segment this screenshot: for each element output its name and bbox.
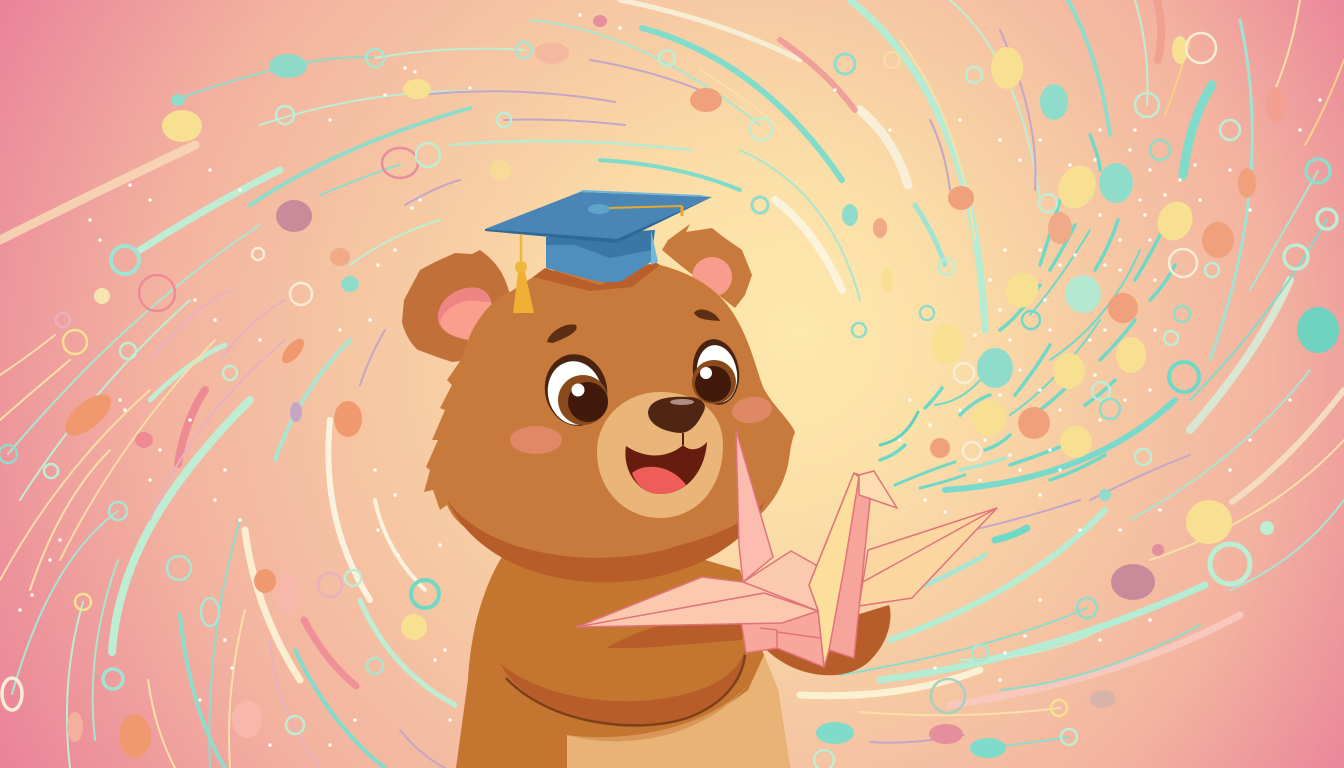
bear bbox=[402, 224, 891, 768]
eyebrows bbox=[547, 310, 720, 343]
bear body bbox=[456, 530, 790, 768]
bear arm bbox=[500, 610, 748, 725]
origami crane bbox=[577, 430, 997, 667]
swirl: dense teal dashes on the right bbox=[880, 135, 1175, 480]
crane tail spike bbox=[736, 430, 773, 582]
bear head bbox=[424, 263, 795, 580]
crane left wing bbox=[577, 577, 818, 627]
cap base bbox=[546, 230, 655, 282]
bear right ear bbox=[662, 224, 752, 308]
bear right hand bbox=[762, 605, 891, 675]
crane lower body bbox=[741, 600, 829, 667]
bear belly bbox=[567, 655, 790, 768]
crane head bbox=[859, 471, 897, 508]
cap board bbox=[485, 192, 712, 241]
graduation cap bbox=[485, 190, 712, 313]
mouth bbox=[625, 433, 707, 494]
bear left eye bbox=[538, 348, 614, 432]
cap cord and tassel bbox=[513, 206, 682, 313]
muzzle bbox=[597, 392, 723, 518]
nose bbox=[648, 397, 705, 433]
head lower shadow bbox=[447, 500, 766, 582]
bear left ear bbox=[402, 250, 510, 362]
crane right wing bbox=[859, 508, 997, 606]
crane neck bbox=[809, 473, 870, 667]
crane body top bbox=[743, 551, 818, 612]
cap button bbox=[588, 204, 610, 214]
bear right eye bbox=[689, 336, 743, 408]
cheeks bbox=[510, 394, 774, 454]
hat shadow on head bbox=[533, 262, 660, 291]
